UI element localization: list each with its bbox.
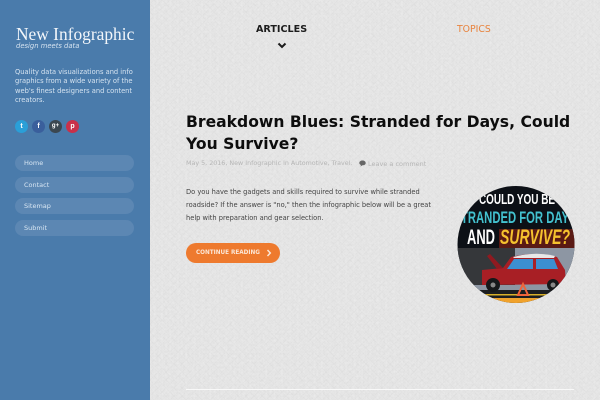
nav: submit: Submit: [24, 224, 47, 232]
site title: New Infographic: [16, 24, 134, 44]
comment link: Leave a comment: [368, 160, 426, 168]
site description: graphics from a wide variety of the: [15, 77, 132, 85]
background texture: [154, 0, 597, 400]
icon: pinterest: [66, 120, 79, 133]
divider: [186, 389, 574, 390]
site description: web's finest designers and content: [15, 86, 132, 94]
post meta: May 5, 2016, New Infographic in Automotive, Travel.: [186, 160, 352, 167]
site description: Quality data visualizations and info: [15, 68, 133, 76]
tagline: design meets data: [16, 42, 79, 50]
site description: creators.: [15, 96, 45, 104]
nav: submit: [15, 220, 134, 236]
tab: articles: ARTICLES: [256, 24, 307, 35]
button: continue reading: [186, 243, 280, 263]
nav: home: [15, 155, 134, 171]
icon: pinterest: p: [70, 123, 75, 130]
icon: google plus: g+: [52, 123, 59, 129]
icon: chevron down: [278, 42, 286, 48]
featured image: [458, 186, 574, 303]
icon: facebook: [32, 120, 45, 133]
icon: google plus: [49, 120, 62, 133]
icon: facebook: f: [37, 123, 40, 130]
article excerpt: help with preparation and gear selection.: [186, 214, 324, 222]
icon: twitter: [15, 120, 28, 133]
article title: Breakdown Blues: Stranded for Days, Could: [186, 113, 570, 131]
article excerpt: Do you have the gadgets and skills required to survive while stranded: [186, 188, 420, 196]
button: continue reading: CONTINUE READING: [196, 250, 260, 256]
featured image: AND: [467, 226, 495, 249]
nav: contact: Contact: [24, 181, 49, 189]
nav: contact: [15, 177, 134, 193]
article excerpt: [186, 188, 431, 222]
icon: comment bubble: [359, 160, 366, 166]
panel: sidebar: [0, 0, 150, 400]
icon: twitter: t: [20, 123, 23, 130]
article title: [186, 113, 570, 153]
nav: sitemap: [15, 198, 134, 214]
site description: [15, 68, 133, 104]
article title: You Survive?: [186, 135, 298, 153]
article excerpt: roadside? If the answer is "no," then the infographic below will be a great: [186, 201, 431, 209]
icon: chevron right: [267, 250, 272, 256]
nav: sitemap: Sitemap: [24, 202, 51, 210]
tab: topics: TOPICS: [457, 24, 491, 35]
nav: home: Home: [24, 159, 43, 167]
